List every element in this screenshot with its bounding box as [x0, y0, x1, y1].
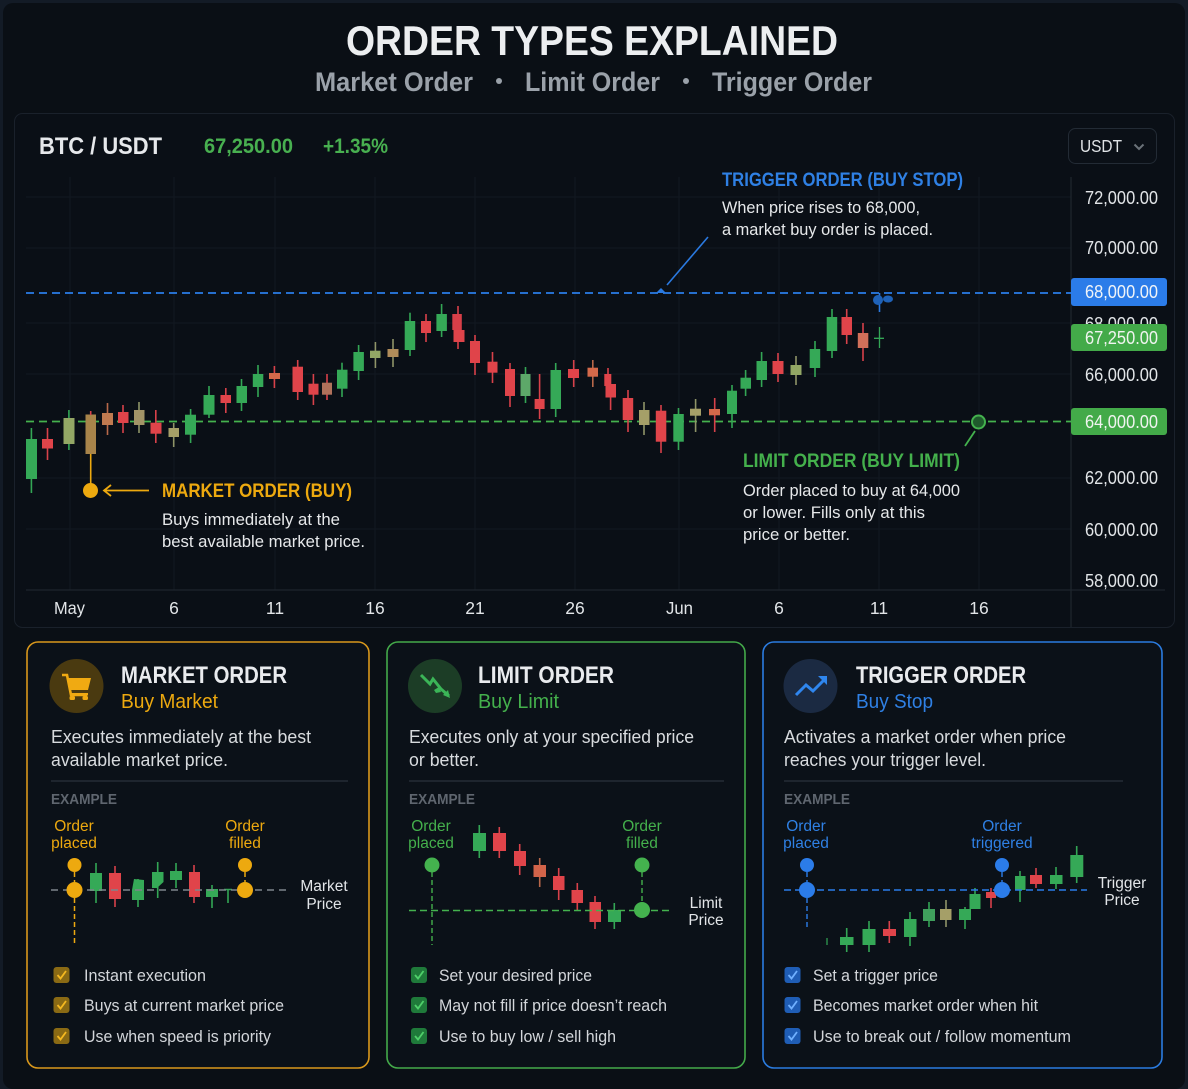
example chart: trigger order: placed — [783, 835, 829, 852]
price axis labels: 58,000.00 — [1085, 571, 1158, 591]
example chart: market order — [51, 818, 348, 945]
checklist — [411, 967, 667, 1046]
time axis labels: 6 — [774, 598, 784, 618]
annotation: limit order: or lower. Fills only at this — [743, 504, 925, 522]
example chart: trigger order: triggered — [971, 835, 1033, 852]
example chart: market order: filled — [229, 835, 261, 852]
time axis labels: 16 — [969, 598, 989, 618]
example chart: limit order: filled — [626, 835, 658, 852]
description: or better. — [409, 750, 479, 770]
example label: EXAMPLE — [409, 791, 475, 808]
description: Executes only at your specified price — [409, 727, 694, 747]
checklist — [54, 967, 284, 1046]
heading — [121, 662, 287, 713]
annotation: trigger order — [656, 170, 963, 293]
price axis labels: 62,000.00 — [1085, 468, 1158, 488]
example chart: trigger order — [783, 818, 1146, 952]
price tag: 68,000: 68,000.00 — [1085, 282, 1158, 302]
checklist: Use to buy low / sell high — [439, 1028, 616, 1046]
example chart: market order: Order — [225, 818, 265, 835]
time axis labels: May — [54, 598, 85, 618]
price axis labels: 66,000.00 — [1085, 365, 1158, 385]
subtitle: Market Order — [315, 67, 473, 97]
checklist: Becomes market order when hit — [813, 997, 1038, 1015]
annotation: trigger order: TRIGGER ORDER (BUY STOP) — [722, 170, 963, 191]
example chart: market order: Market — [300, 878, 348, 895]
checklist: May not fill if price doesn’t reach — [439, 997, 667, 1015]
annotation: limit order: Order placed to buy at 64,000 — [743, 482, 960, 500]
trigger price line — [26, 292, 1071, 294]
description: Executes immediately at the best — [51, 727, 311, 747]
currency dropdown — [1068, 128, 1156, 164]
time axis labels: 11 — [266, 598, 284, 618]
price axis labels: 70,000.00 — [1085, 238, 1158, 258]
icon: falling zigzag arrow — [408, 659, 462, 713]
time axis labels: 16 — [365, 598, 385, 618]
checklist: Buys at current market price — [84, 997, 284, 1015]
example chart: trigger order: Order — [982, 818, 1022, 835]
panel: limit order — [387, 642, 745, 1068]
checklist — [784, 967, 1071, 1046]
description: available market price. — [51, 750, 228, 770]
subtitle — [315, 67, 872, 97]
heading — [478, 662, 614, 713]
heading — [856, 662, 1026, 713]
chart header: pair and price: 67,250.00 — [204, 135, 293, 158]
example chart: limit order: Limit — [690, 895, 723, 912]
example chart: limit order: placed — [408, 835, 454, 852]
panel: market order — [27, 642, 369, 1068]
example label: EXAMPLE — [51, 791, 117, 808]
icon: rising arrow — [784, 659, 838, 713]
annotation: market order: Buys immediately at the — [162, 511, 340, 529]
chart header: pair and price: +1.35% — [323, 135, 388, 158]
price tag: 64,000: 64,000.00 — [1085, 412, 1158, 432]
annotation: market order: best available market price. — [162, 533, 365, 551]
description — [51, 727, 311, 770]
description: reaches your trigger level. — [784, 750, 986, 770]
example chart: market order: Price — [306, 896, 342, 913]
time axis labels: Jun — [666, 598, 693, 618]
currency dropdown: USDT — [1080, 136, 1122, 156]
example chart: limit order: Order — [622, 818, 662, 835]
annotation: trigger order: a market buy order is placed. — [722, 221, 933, 239]
price tag: 67,250: 67,250.00 — [1085, 328, 1158, 348]
chart header: pair and price: BTC / USDT — [39, 133, 162, 160]
price axis labels: 72,000.00 — [1085, 188, 1158, 208]
example chart: market order: placed — [51, 835, 97, 852]
checklist: Instant execution — [84, 967, 206, 985]
trigger fill marker — [873, 295, 893, 305]
price tag: 68,000 — [1071, 278, 1167, 306]
time axis labels: 21 — [465, 598, 485, 618]
example chart: trigger order: Price — [1104, 892, 1140, 909]
example chart: trigger order: Trigger — [1098, 875, 1146, 892]
description: Activates a market order when price — [784, 727, 1066, 747]
example chart: limit order: Order — [411, 818, 451, 835]
annotation: market order — [83, 454, 365, 551]
price axis labels — [1085, 188, 1158, 591]
grid — [26, 177, 1071, 590]
example chart: limit order: Price — [688, 912, 724, 929]
price axis labels: 68,000.00 — [1085, 314, 1158, 334]
time axis labels — [54, 598, 989, 618]
heading: TRIGGER ORDER — [856, 662, 1026, 689]
time axis labels: 26 — [565, 598, 585, 618]
annotation: limit order — [743, 416, 985, 544]
panel: trigger order — [763, 642, 1162, 1068]
annotation: limit order: LIMIT ORDER (BUY LIMIT) — [743, 451, 960, 472]
example chart: limit order — [408, 818, 724, 945]
annotation: trigger order: When price rises to 68,000, — [722, 199, 920, 217]
description — [784, 727, 1066, 770]
price tag: 64,000 — [1071, 408, 1167, 435]
time axis labels: 11 — [870, 598, 888, 618]
checklist: Use when speed is priority — [84, 1028, 272, 1046]
candlesticks — [26, 293, 884, 493]
checklist: Set a trigger price — [813, 967, 938, 985]
heading: Buy Stop — [856, 690, 933, 713]
chart header: pair and price — [39, 133, 388, 160]
price tag: 67,250 — [1071, 324, 1167, 351]
title: ORDER TYPES EXPLAINED — [346, 17, 838, 64]
checklist: Set your desired price — [439, 967, 592, 985]
annotation: limit order: price or better. — [743, 526, 850, 544]
subtitle: Limit Order — [525, 67, 660, 97]
heading: Buy Limit — [478, 690, 559, 713]
limit price line — [26, 420, 1071, 422]
icon: shopping cart — [50, 659, 104, 713]
example label: EXAMPLE — [784, 791, 850, 808]
subtitle: Trigger Order — [712, 67, 872, 97]
heading: Buy Market — [121, 690, 218, 713]
annotation: market order: MARKET ORDER (BUY) — [162, 481, 352, 502]
description — [409, 727, 694, 770]
time axis labels: 6 — [169, 598, 179, 618]
example chart: market order: Order — [54, 818, 94, 835]
panel: price chart — [14, 114, 1174, 628]
price axis labels: 60,000.00 — [1085, 520, 1158, 540]
example chart: trigger order: Order — [786, 818, 826, 835]
heading: LIMIT ORDER — [478, 662, 614, 689]
checklist: Use to break out / follow momentum — [813, 1028, 1071, 1046]
heading: MARKET ORDER — [121, 662, 287, 689]
